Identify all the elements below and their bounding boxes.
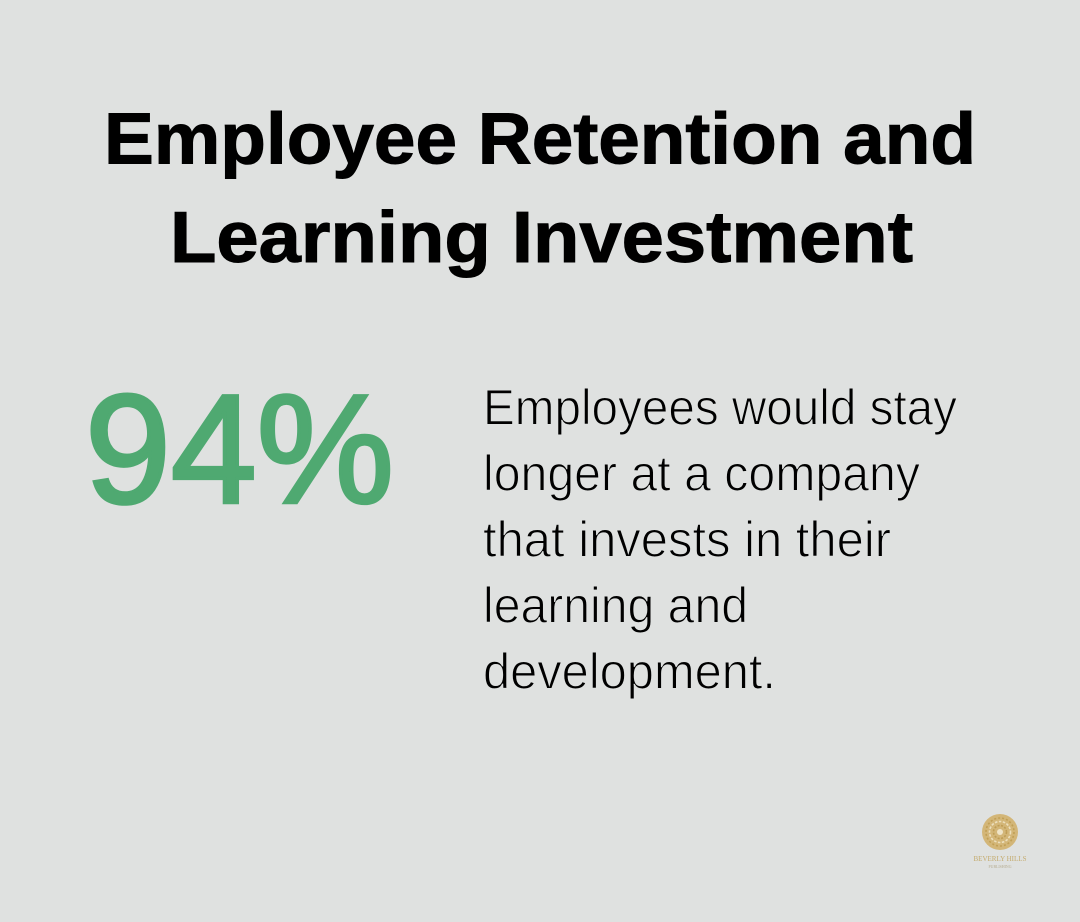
description text: development.	[483, 644, 776, 700]
logo emblem	[982, 814, 1018, 850]
title: Employee Retention and	[104, 100, 976, 180]
description text: longer at a company	[483, 446, 920, 502]
title	[104, 100, 976, 278]
logo wordmark: BEVERLY HILLS	[974, 854, 1026, 863]
statistic: 94%: 94%	[85, 362, 394, 536]
description text: learning and	[483, 578, 748, 634]
title: Learning Investment	[170, 198, 913, 278]
description text: Employees would stay	[483, 380, 957, 436]
logo subtitle: PUBLISHING	[988, 864, 1012, 869]
description text	[483, 380, 957, 700]
description text: that invests in their	[483, 512, 891, 568]
logo: Beverly Hills Publishing	[974, 814, 1026, 869]
